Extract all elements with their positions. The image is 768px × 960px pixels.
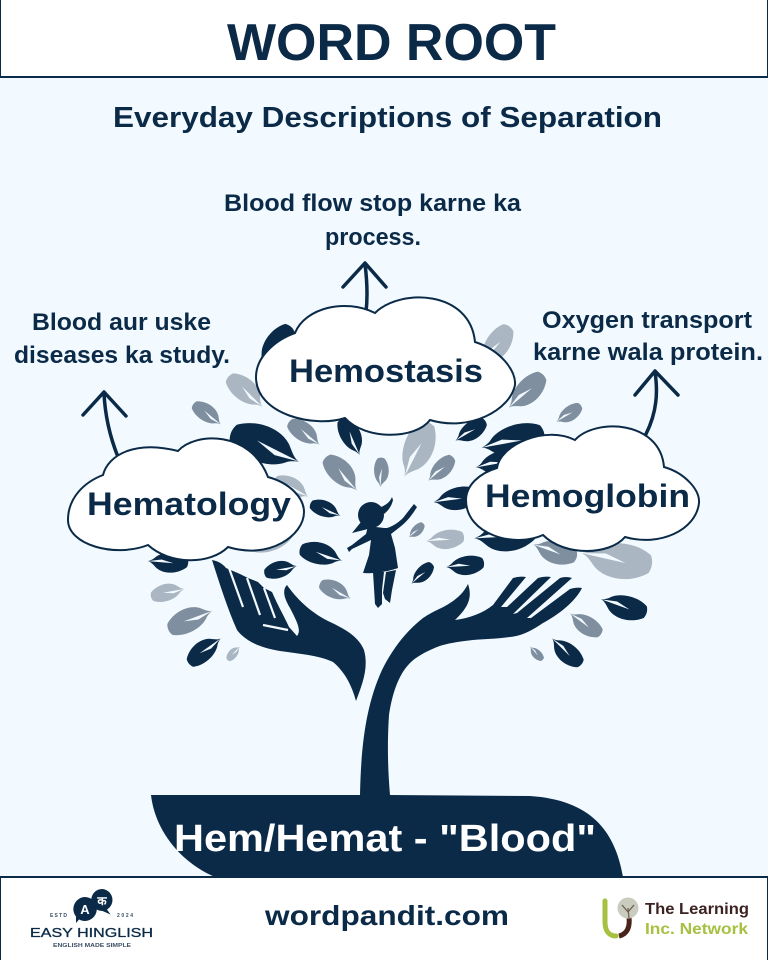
text block: Blood aur xyxy=(14,309,230,369)
logo: Easy Hinglish: EASY HINGLISH xyxy=(30,925,153,940)
tree: trunk, right hand and ground xyxy=(151,577,623,877)
child silhouette xyxy=(347,497,417,608)
text block: Blood aur: diseases ka study. xyxy=(14,342,230,369)
arrow to Blood flow text xyxy=(343,263,386,312)
root label: Hem/Hemat - "Blood" xyxy=(174,818,596,860)
label: Hemostasis: Hemostasis xyxy=(289,353,483,389)
logo: The Learning Inc. Network xyxy=(605,898,749,938)
label: Hemoglobin: Hemoglobin xyxy=(485,478,690,514)
website: wordpandit.com xyxy=(264,900,509,931)
logo: The Learning Inc. Network: Inc. Network xyxy=(645,921,748,938)
logo: Easy Hinglish xyxy=(30,889,153,949)
arrow to Blood aur text xyxy=(83,392,126,457)
text block: Blood flow: Blood flow stop karne ka xyxy=(224,190,522,217)
logo: Easy Hinglish: ESTD xyxy=(50,913,67,919)
footer panel xyxy=(0,877,768,960)
text block: Oxygen transport: Oxygen transport xyxy=(542,307,752,334)
logo: The Learning Inc. Network: The Learning xyxy=(645,901,749,918)
logo: Easy Hinglish: A xyxy=(80,902,90,917)
arrow to Oxygen text xyxy=(635,371,678,434)
subtitle: Everyday Descriptions of Separation xyxy=(113,102,662,134)
text block: Blood flow xyxy=(224,190,522,251)
cloud: Hemoglobin xyxy=(466,426,699,551)
text block: Oxygen transport: karne wala protein. xyxy=(533,339,763,366)
text block: Blood flow: process. xyxy=(325,224,421,251)
header panel xyxy=(0,0,768,77)
title: WORD ROOT xyxy=(227,14,556,72)
logo: Easy Hinglish: ENGLISH MADE SIMPLE xyxy=(53,943,131,949)
left hand finger gaps xyxy=(229,568,288,630)
cloud: Hematology xyxy=(68,438,304,560)
text block: Oxygen transport xyxy=(533,307,763,366)
text block: Blood aur: Blood aur uske xyxy=(32,309,211,336)
label: Hematology: Hematology xyxy=(87,486,291,522)
left hand xyxy=(212,560,366,701)
logo: Easy Hinglish: 2024 xyxy=(117,913,133,919)
logo: Easy Hinglish: क xyxy=(96,894,107,908)
cloud: Hemostasis xyxy=(256,297,515,435)
leaves behind the clouds xyxy=(148,319,654,672)
